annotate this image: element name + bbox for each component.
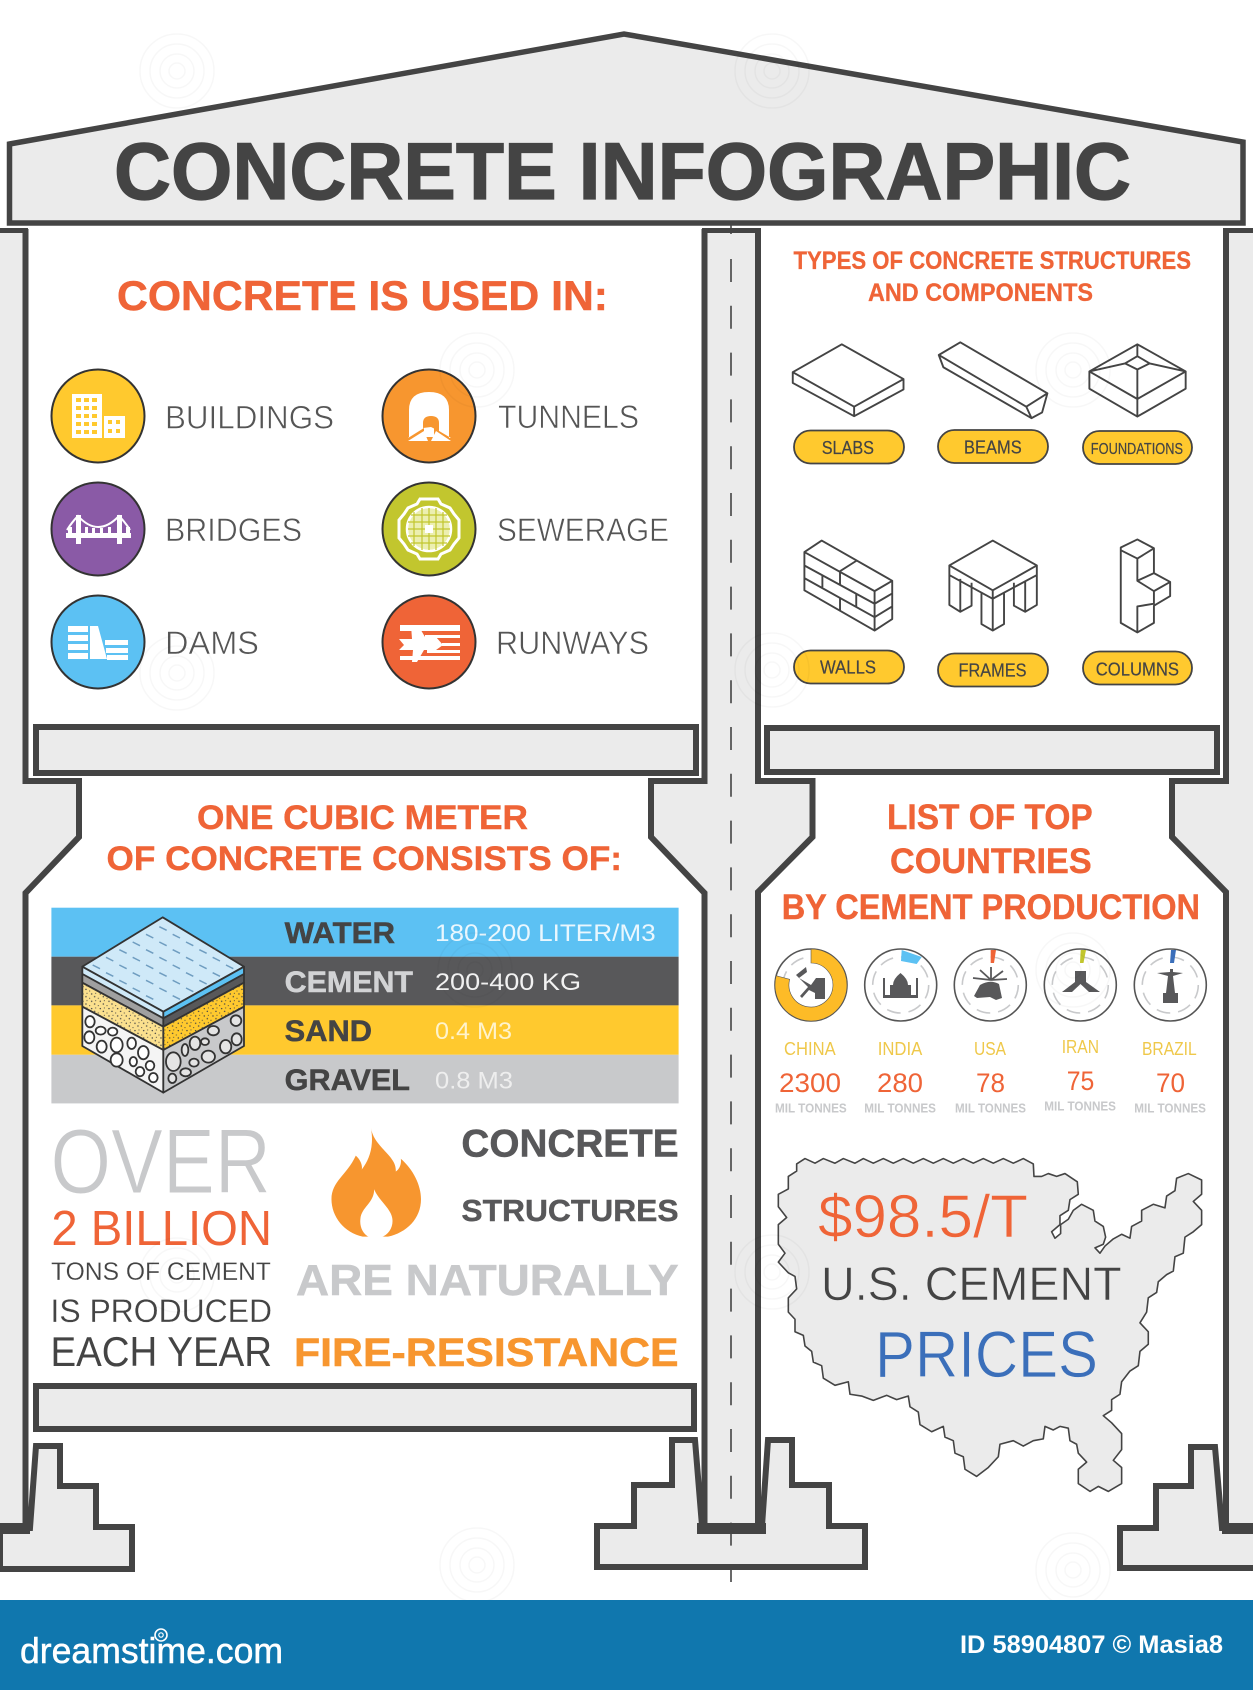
label: cement: CEMENT xyxy=(285,966,413,999)
pill: frames xyxy=(938,654,1048,686)
icon: frames xyxy=(949,541,1037,631)
heading: list of top: LIST OF TOP xyxy=(887,798,1093,837)
callout: concrete structures are naturally fire-resistance: CONCRETE xyxy=(461,1122,679,1166)
pill: foundations xyxy=(1083,431,1192,464)
country stats: IRAN xyxy=(1062,1037,1099,1057)
gauge: china xyxy=(775,949,847,1021)
country stats: BRAZIL xyxy=(1142,1039,1197,1059)
price: $98.5/T: $98.5/T xyxy=(818,1183,1028,1250)
country stats: 280 xyxy=(877,1068,923,1098)
footing: center xyxy=(597,1440,865,1567)
stat: over 2 billion tons xyxy=(50,1111,272,1375)
pill: beams: BEAMS xyxy=(964,436,1022,458)
watermark spirals xyxy=(140,34,1110,1607)
stat: over 2 billion tons: IS PRODUCED xyxy=(50,1293,272,1329)
heading: countries: COUNTRIES xyxy=(890,842,1092,881)
pill: slabs xyxy=(794,430,904,464)
callout: concrete structures are naturally fire-resistance: FIRE-RESISTANCE xyxy=(294,1331,679,1375)
gauge: india xyxy=(865,949,937,1021)
image id and credit: ID 58904807 © Masia8 xyxy=(960,1631,1223,1659)
panel: top countries by cement production xyxy=(775,798,1206,1491)
logo: dreamstime: dreamstime.com xyxy=(20,1630,283,1671)
panel: right side, outline xyxy=(758,229,1226,1690)
value: gravel: 0.8 M3 xyxy=(435,1067,513,1094)
value: water: 180-200 LITER/M3 xyxy=(435,920,656,947)
heading: concrete is used in: CONCRETE IS USED IN: xyxy=(117,272,608,319)
icon: tunnels xyxy=(382,370,476,462)
footing: left xyxy=(0,1446,132,1569)
heading line: and components: AND COMPONENTS xyxy=(868,279,1093,307)
pill: columns xyxy=(1083,652,1192,684)
label: U.S. cement: U.S. CEMENT xyxy=(821,1257,1122,1310)
country stats: INDIA xyxy=(878,1039,922,1059)
gauge: brazil xyxy=(1134,949,1206,1021)
heading: of concrete consists of: OF CONCRETE CONSISTS OF: xyxy=(106,840,622,878)
country stats: 70 xyxy=(1156,1068,1185,1098)
stat: over 2 billion tons: EACH YEAR xyxy=(50,1328,272,1375)
value: sand: 0.4 M3 xyxy=(435,1018,512,1045)
heading: one cubic meter: ONE CUBIC METER xyxy=(197,799,528,837)
callout: concrete structures are naturally fire-resistance xyxy=(294,1122,679,1375)
label: sewerage: SEWERAGE xyxy=(497,512,669,548)
label: dams: DAMS xyxy=(165,625,259,661)
panel: concrete is used in xyxy=(52,272,669,688)
label: tunnels: TUNNELS xyxy=(498,399,639,435)
label: water: WATER xyxy=(285,917,395,950)
country stats: MIL TONNES xyxy=(1044,1100,1116,1114)
gauge: iran xyxy=(1044,949,1116,1021)
center axis dashed line xyxy=(730,259,732,1582)
icon: dams xyxy=(52,596,144,688)
country stats: 2300 xyxy=(779,1068,841,1098)
pill: frames: FRAMES xyxy=(958,660,1026,680)
isometric structure icons xyxy=(793,342,1186,632)
pill: slabs: SLABS xyxy=(822,437,874,458)
label: gravel: GRAVEL xyxy=(285,1064,410,1097)
heading: by cement production: BY CEMENT PRODUCTION xyxy=(782,888,1200,927)
icon: bridges xyxy=(52,482,144,576)
panel: one cubic meter xyxy=(50,799,679,1375)
beam: upper right xyxy=(767,728,1217,772)
country stats: CHINA xyxy=(784,1039,836,1059)
heading: types of concrete structures: TYPES OF CONCRETE STRUCTURES xyxy=(794,247,1191,275)
pill: walls: WALLS xyxy=(820,656,876,678)
callout: concrete structures are naturally fire-resistance: ARE NATURALLY xyxy=(296,1256,679,1305)
footer bar xyxy=(0,1600,1253,1690)
title: CONCRETE INFOGRAPHIC xyxy=(114,127,1131,217)
pill: walls xyxy=(794,650,904,684)
roof xyxy=(10,34,1243,223)
icon: walls xyxy=(804,541,892,631)
country stats: USA xyxy=(974,1039,1006,1059)
gauge: usa xyxy=(954,949,1026,1021)
panel: concrete is used in, outline xyxy=(26,229,704,1690)
footing: right xyxy=(1120,1447,1253,1568)
label: bridges: BRIDGES xyxy=(165,512,302,548)
label: sand: SAND xyxy=(285,1015,372,1048)
map: united states xyxy=(778,1159,1202,1491)
icon: sewerage xyxy=(382,482,476,576)
pill: foundations: FOUNDATIONS xyxy=(1091,441,1183,458)
stat: over 2 billion tons: TONS OF CEMENT xyxy=(51,1258,271,1286)
icon: buildings xyxy=(52,370,144,462)
pill: columns: COLUMNS xyxy=(1096,658,1179,680)
label: runways: RUNWAYS xyxy=(496,625,649,661)
callout: concrete structures are naturally fire-resistance: STRUCTURES xyxy=(461,1193,679,1228)
value: cement: 200-400 KG xyxy=(435,969,581,996)
country stats: 78 xyxy=(976,1068,1005,1098)
country stats: MIL TONNES xyxy=(1134,1102,1206,1116)
icon: slab xyxy=(793,344,904,416)
composition bands xyxy=(51,908,679,1103)
beam: lower left xyxy=(36,1386,694,1429)
icon: beam xyxy=(939,342,1047,418)
label: prices: PRICES xyxy=(875,1317,1098,1391)
country stats: MIL TONNES xyxy=(864,1102,936,1116)
beam: upper left xyxy=(36,727,696,773)
stat: over 2 billion tons: OVER xyxy=(50,1111,271,1213)
country stats: MIL TONNES xyxy=(775,1102,847,1116)
icon: layered concrete cube xyxy=(82,917,244,1093)
country stats: MIL TONNES xyxy=(955,1102,1026,1116)
pill: beams xyxy=(938,430,1048,463)
label: buildings: BUILDINGS xyxy=(165,400,334,436)
icon: columns xyxy=(1121,539,1170,632)
icon: runways xyxy=(382,596,476,688)
icon: flame xyxy=(331,1128,421,1237)
country stats xyxy=(775,1037,1206,1116)
panel: types of concrete structures xyxy=(793,247,1192,686)
stat: over 2 billion tons: 2 BILLION xyxy=(51,1202,272,1256)
country stats: 75 xyxy=(1067,1066,1094,1096)
icon: foundation xyxy=(1089,344,1186,417)
